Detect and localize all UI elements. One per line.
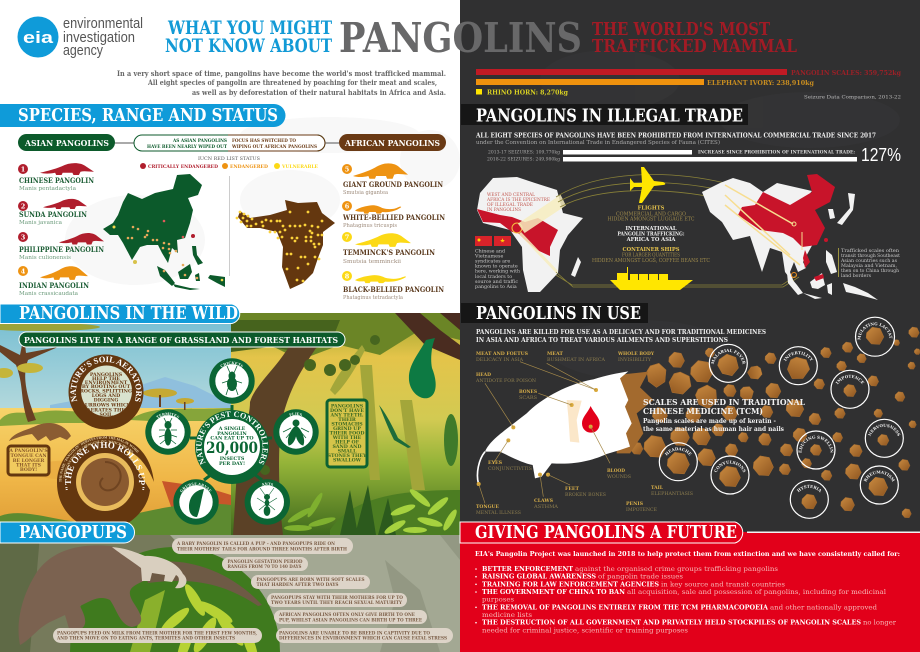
hanging green pangolin bbox=[409, 338, 436, 398]
callout: tongue: BE LONGER bbox=[13, 458, 45, 464]
callout: focus switched: HAVE BEEN NEARLY WIPED OUT bbox=[147, 144, 228, 150]
text: epicentre: IN PANGOLINS bbox=[487, 207, 521, 213]
circle: flies: FLIES bbox=[289, 412, 302, 416]
title: PANGOLINS bbox=[339, 14, 582, 62]
badge: the one who rolls up: THE NAME "PANGOLIN" DERIVES FROM THE MALAY WORD bbox=[59, 436, 138, 482]
species: Philippine pangolin bbox=[18, 232, 104, 261]
species: Chinese pangolin: Manis pentadactyla bbox=[19, 186, 77, 192]
list: calls to action: against the organised crime groups trafficking pangolins bbox=[575, 566, 778, 573]
red background bbox=[460, 532, 920, 652]
bottom foliage bbox=[284, 414, 459, 536]
ailment labels: MALARIAL FEVER bbox=[711, 348, 746, 364]
text: container ships: CONTAINER SHIPS bbox=[623, 247, 680, 253]
badge: nature's pest controllers: NATURE'S PEST CONTROLLERS bbox=[196, 411, 268, 466]
callout: no teeth: SMALL bbox=[338, 448, 357, 454]
chart: seizure data comparison bbox=[476, 69, 902, 100]
fact: maturity bbox=[267, 593, 407, 607]
chart: seizures increase: INCREASE SINCE PROHIBITION OF INTERNATIONAL TRADE: bbox=[698, 150, 855, 156]
subheading: habitats bbox=[19, 332, 345, 347]
species: black-bellied pangolin: Phataginus tetradactyla bbox=[343, 295, 404, 301]
heading: in the wild: PANGOLINS IN THE WILD bbox=[19, 303, 238, 324]
panel: species, range and status bbox=[0, 104, 446, 301]
species: Chinese pangolin: CHINESE PANGOLIN bbox=[19, 176, 94, 185]
circles: ailments treated by scales bbox=[659, 317, 903, 518]
text: ailments statement: PANGOLINS ARE KILLED FOR USE AS A DELICACY AND FOR TRADITIONAL MEDICINES bbox=[476, 328, 766, 336]
text: transit: then on to China through bbox=[841, 268, 899, 274]
text: international pangolin trafficking bbox=[618, 226, 685, 243]
badge: nature's soil aerators: LOGS AND bbox=[92, 393, 120, 399]
species: white-bellied pangolin: Phataginus tricuspis bbox=[343, 223, 397, 229]
icon: plane bbox=[630, 167, 665, 203]
ailment labels: HYSTERIA bbox=[796, 484, 821, 492]
text: syndicates: known to operate bbox=[475, 264, 518, 270]
logo: EIA: investigation bbox=[63, 29, 135, 46]
labels: body parts: PENIS bbox=[626, 501, 643, 507]
callout: no teeth: HELP OF bbox=[335, 440, 360, 446]
fact: pup name bbox=[172, 538, 353, 554]
pangolin pup bbox=[112, 547, 186, 588]
fact: soft scales: PANGOPUPS ARE BORN WITH SOFT SCALES bbox=[256, 577, 365, 583]
callout: no teeth: DON'T HAVE bbox=[330, 408, 364, 414]
callout: no teeth: SAND AND bbox=[332, 444, 362, 450]
ailment labels: IMPOTENCE bbox=[836, 374, 864, 384]
text: container ships: FOR LARGER QUANTITIES bbox=[622, 252, 680, 258]
species: Sunda pangolin: 2 bbox=[21, 202, 25, 210]
legend: IUCN red list status bbox=[140, 156, 318, 170]
labels: body parts: MEAT AND FOETUS bbox=[476, 351, 528, 357]
texture of dark panel bbox=[540, 50, 900, 380]
ailment labels bbox=[664, 322, 900, 492]
ailment labels: RHEUMATISM bbox=[864, 470, 895, 482]
chart: seizure data comparison: PANGOLIN SCALES: 359,752kg bbox=[791, 69, 902, 77]
fact: soft scales: THAT HARDEN AFTER TWO DAYS bbox=[256, 582, 339, 588]
species: giant ground pangolin: 5 bbox=[345, 166, 350, 174]
species: white-bellied pangolin bbox=[342, 201, 445, 229]
text: intro to calls: EIA's Pangolin Project was launched in 2018 to help protect them from extinction and we have consistently called for: bbox=[475, 550, 900, 558]
panel: pangopups bbox=[0, 522, 460, 652]
list: calls to action: TRAINING FOR LAW ENFORCEMENT AGENCIES bbox=[482, 581, 659, 588]
fact: captivity bbox=[276, 628, 453, 643]
chart: seizures increase: 2013-17 SEIZURES: 109,770kg bbox=[488, 150, 560, 156]
list: calls to action bbox=[475, 566, 897, 634]
text: transit: Trafficked scales often bbox=[841, 248, 899, 254]
text: TCM: the same material as human hair and nails bbox=[643, 426, 784, 433]
title: TRAFFICKED MAMMAL bbox=[592, 36, 797, 57]
logo: EIA bbox=[18, 15, 143, 59]
text: container ships: HIDDEN AMONGST LOGS, COFFEE BEANS ETC bbox=[592, 258, 710, 264]
badge: nature's pest controllers: A SINGLE bbox=[218, 426, 246, 432]
callout: tongue: TONGUE CAN bbox=[10, 453, 47, 459]
species: white-bellied pangolin: WHITE-BELLIED PANGOLIN bbox=[342, 213, 445, 222]
callout: no teeth: ANY TEETH. bbox=[329, 412, 364, 418]
text: transit: land borders bbox=[841, 273, 872, 279]
badge: nature's pest controllers: PER DAY! bbox=[219, 461, 245, 467]
fact: maturity: TWO YEARS UNTIL THEY REACH SEXUAL MATURITY bbox=[271, 600, 403, 606]
text: international pangolin trafficking: INTERNATIONAL bbox=[626, 226, 677, 232]
labels: body parts: TONGUE bbox=[476, 504, 499, 510]
fact: captivity: DIFFERENCES IN ENVIRONMENT WHICH CAN CAUSE FATAL STRESS bbox=[279, 636, 448, 642]
scales cloud bbox=[630, 327, 920, 518]
labels: body parts: FEET bbox=[565, 486, 579, 492]
species: Philippine pangolin: 3 bbox=[21, 234, 26, 242]
species: Indian pangolin: INDIAN PANGOLIN bbox=[19, 281, 89, 290]
text: TCM bbox=[643, 397, 805, 433]
species: Indian pangolin bbox=[18, 266, 89, 297]
callout: no teeth: PANGOLINS bbox=[331, 404, 364, 410]
chart: seizures increase bbox=[487, 145, 901, 165]
circle: crickets: CRICKETS bbox=[220, 362, 244, 368]
labels: body parts: ELEPHANTIASIS bbox=[651, 491, 694, 497]
ailment labels: REDUCING SWELLING bbox=[798, 436, 834, 453]
heading: future: GIVING PANGOLINS A FUTURE bbox=[475, 522, 737, 543]
callout: tongue: THAT ITS bbox=[16, 462, 42, 468]
badge: nature's pest controllers: 20,000 bbox=[206, 438, 258, 457]
text: flights bbox=[608, 206, 695, 222]
callout: tongue: A PANGOLIN'S bbox=[8, 448, 48, 454]
ailment labels: NERVOUSNESS bbox=[868, 424, 900, 436]
background: white left half bbox=[0, 0, 460, 652]
intro text: as well as by deforestation of their natural habitats in Africa and Asia. bbox=[192, 88, 446, 97]
text: prohibition statement: ALL EIGHT SPECIES OF PANGOLINS HAVE BEEN PROHIBITED FROM INTERNATIONAL COMMERCIAL TRADE SINCE 2017 bbox=[475, 132, 876, 140]
text: flights: COMMERCIAL AND CARGO bbox=[616, 212, 686, 218]
callout: no teeth: WITH THE bbox=[332, 435, 362, 441]
badge: nature's soil aerators: AERATES THE bbox=[86, 408, 125, 414]
callout: no teeth: STOMACHS bbox=[331, 422, 363, 428]
fact: pup name: A BABY PANGOLIN IS CALLED A PUP – AND PANGOPUPS RIDE ON bbox=[176, 541, 336, 547]
pill: asian pangolins: ASIAN PANGOLINS bbox=[24, 139, 109, 149]
species: Philippine pangolin: PHILIPPINE PANGOLIN bbox=[19, 245, 104, 254]
list: calls to action: THE GOVERNMENT OF CHINA TO BAN bbox=[482, 589, 625, 596]
list: calls to action: no longer bbox=[863, 620, 897, 627]
text: flights: HIDDEN AMONGST LUGGAGE ETC bbox=[608, 216, 695, 222]
callout: focus switched: FOCUS HAS SWITCHED TO bbox=[232, 138, 296, 144]
ailment labels: STIMULATING LACTATION bbox=[858, 322, 892, 340]
connectors between pest circles bbox=[190, 405, 272, 480]
species: white-bellied pangolin: 6 bbox=[345, 202, 350, 210]
ailment labels: CONVULSIONS bbox=[714, 460, 746, 472]
text: TCM: Pangolin scales are made up of keratin - bbox=[643, 418, 776, 425]
labels: body parts: IMPOTENCE bbox=[626, 507, 657, 513]
list: calls to action: RAISING GLOBAL AWARENESS bbox=[482, 574, 596, 580]
callout: focus switched: AS ASIAN PANGOLINS bbox=[172, 138, 227, 144]
callout: focus switched: WIPING OUT AFRICAN PANGOLINS bbox=[231, 144, 317, 150]
text: syndicates: Chinese and bbox=[475, 248, 505, 254]
badge: nature's pest controllers: INSECTS bbox=[220, 456, 245, 462]
species: Philippine pangolin: Manis culionensis bbox=[19, 255, 71, 261]
text: transit: Asian countries such as bbox=[840, 258, 898, 264]
badge: nature's soil aerators: ENVIRONMENT bbox=[85, 380, 128, 386]
chart: seizure data comparison: RHINO HORN: 8,270kg bbox=[487, 88, 569, 96]
logo: EIA: environmental bbox=[63, 15, 143, 32]
text: epicentre: OF ILLEGAL TRADE bbox=[487, 202, 534, 208]
labels: body parts: BUSHMEAT IN AFRICA bbox=[547, 357, 605, 363]
species: black-bellied pangolin: BLACK-BELLIED PANGOLIN bbox=[343, 285, 444, 294]
text: epicentre: WEST AND CENTRAL bbox=[487, 192, 535, 198]
chart: seizure data comparison: ELEPHANT IVORY: 238,910kg bbox=[707, 79, 815, 87]
labels: body parts: CONJUNCTIVITIS bbox=[488, 466, 533, 472]
species: giant ground pangolin: Smutsia gigantea bbox=[343, 190, 389, 196]
species: Sunda pangolin: SUNDA PANGOLIN bbox=[19, 210, 87, 219]
intro text: All eight species of pangolin are threatened by poaching for their meat and scales, bbox=[147, 78, 437, 87]
pill: asian pangolins bbox=[18, 134, 115, 151]
icon: container ship bbox=[610, 267, 693, 290]
map: Asia destination bbox=[702, 174, 878, 300]
text: epicentre: AFRICA IS THE EPICENTRE bbox=[486, 197, 551, 203]
text: syndicates: local traders to bbox=[475, 274, 512, 280]
map: Africa source bbox=[477, 177, 583, 292]
labels: body parts: TAIL bbox=[651, 485, 663, 491]
labels: body parts bbox=[475, 351, 694, 516]
list: calls to action: THE DESTRUCTION OF ALL GOVERNMENT AND PRIVATELY HELD STOCKPILES OF PANGOLIN SCALES bbox=[482, 620, 861, 627]
fact: pup name: THEIR MOTHERS' TAILS FOR AROUND THREE MONTHS AFTER BIRTH bbox=[177, 546, 348, 552]
jungle background bbox=[231, 313, 460, 535]
labels: body parts: BONES bbox=[519, 389, 537, 395]
chart: seizures increase: 2018-22 SEIZURES: 249,980kg bbox=[487, 158, 560, 162]
panel: pangolins in use bbox=[461, 303, 920, 519]
legend: IUCN red list status: VULNERABLE bbox=[281, 164, 318, 170]
ailment labels: INFERTILITY bbox=[784, 351, 814, 362]
tail and branch bbox=[142, 561, 262, 606]
map: Africa range bbox=[236, 200, 335, 289]
species: Sunda pangolin bbox=[18, 199, 87, 226]
circle: ants bbox=[244, 479, 290, 525]
acacia trees bbox=[0, 323, 194, 422]
species: Chinese pangolin bbox=[18, 163, 94, 192]
labels: body parts: DELICACY IN ASIA bbox=[476, 357, 523, 363]
list: calls to action: of pangolin trade issues bbox=[598, 574, 683, 580]
text: transit: transit through Southeast bbox=[841, 253, 900, 259]
species: Indian pangolin: Manis crassicaudata bbox=[19, 291, 79, 297]
list: calls to action: THE REMOVAL OF PANGOLINS ENTIRELY FROM THE TCM PHARMACOPOEIA bbox=[482, 604, 768, 611]
badge: nature's soil aerators: HELP THE bbox=[92, 376, 120, 382]
list: calls to action: needed for criminal justice, scientific or training purposes bbox=[482, 627, 688, 634]
heading: pangopups: PANGOPUPS bbox=[19, 522, 127, 543]
chameleon bbox=[379, 405, 411, 448]
text: international pangolin trafficking: AFRICA TO ASIA bbox=[626, 237, 676, 243]
pangolin body outline with organs bbox=[477, 362, 653, 503]
badge: the one who rolls up: "PENGGULING" OR "PENGGULIN", WHICH MEANS bbox=[63, 440, 134, 478]
species: Sunda pangolin: Manis javanica bbox=[19, 220, 63, 226]
species: Indian pangolin: 4 bbox=[21, 268, 26, 276]
green leaf circle bbox=[70, 547, 280, 652]
text: syndicates: source and traffic bbox=[475, 279, 518, 285]
savannah background bbox=[0, 313, 231, 535]
chart: seizure data comparison: Seizure Data Comparison, 2013-22 bbox=[804, 94, 901, 100]
labels: body parts: ASTHMA bbox=[533, 504, 558, 510]
pill: african pangolins: AFRICAN PANGOLINS bbox=[344, 139, 440, 149]
callout: no teeth bbox=[327, 400, 367, 467]
species: giant ground pangolin bbox=[342, 163, 443, 196]
fact: birth: AFRICAN PANGOLINS OFTEN ONLY GIVE BIRTH TO ONE bbox=[278, 612, 415, 618]
list: calls to action: purposes bbox=[482, 597, 514, 604]
list: calls to action: in key source and transit countries bbox=[661, 581, 785, 588]
species: giant ground pangolin: GIANT GROUND PANGOLIN bbox=[343, 180, 443, 189]
text: ailments statement: IN ASIA AND AFRICA TO TREAT VARIOUS AILMENTS AND SUPERSTITIONS bbox=[476, 336, 728, 344]
text: ailments statement bbox=[476, 328, 766, 344]
text: flights: FLIGHTS bbox=[638, 206, 665, 212]
circle: termites bbox=[145, 409, 191, 455]
panel: pangolins in illegal trade bbox=[461, 104, 901, 300]
circle: ants: ANTS bbox=[262, 482, 274, 486]
hanging tree top right bbox=[395, 313, 460, 360]
pill: african pangolins bbox=[339, 134, 446, 151]
badge: nature's pest controllers: PANGOLIN bbox=[217, 431, 247, 437]
text: syndicates: here, working with bbox=[475, 268, 520, 274]
icon: flags of China and Vietnam bbox=[475, 236, 511, 246]
badge: nature's soil aerators: NATURE'S SOIL AERATORS bbox=[70, 356, 142, 402]
heading: species: SPECIES, RANGE AND STATUS bbox=[18, 105, 278, 126]
text: TCM: SCALES ARE USED IN TRADITIONAL bbox=[643, 397, 805, 407]
species: black-bellied pangolin: 8 bbox=[345, 272, 350, 280]
heading: illegal trade: PANGOLINS IN ILLEGAL TRADE bbox=[476, 106, 743, 126]
leaves over trunk bbox=[260, 335, 380, 475]
list: calls to action: BETTER ENFORCEMENT bbox=[482, 566, 573, 573]
badge: nature's soil aerators: BURROWS WHICH bbox=[81, 402, 132, 408]
tree trunk and branches bbox=[233, 345, 318, 535]
callout: no teeth: SWALLOW bbox=[333, 458, 362, 464]
fact: gestation: RANGES FROM 70 TO 140 DAYS bbox=[228, 564, 302, 570]
badge: the one who rolls up: "THE ONE WHO ROLLS UP" bbox=[65, 442, 145, 490]
intro text bbox=[117, 69, 446, 97]
list: calls to action: all acquisition, sale and possession of pangolins, including for medicinal bbox=[627, 589, 886, 596]
callout: focus switched bbox=[115, 135, 339, 151]
labels: body parts: CLAWS bbox=[534, 498, 553, 504]
badge: nature's soil aerators: PANGOLINS bbox=[90, 372, 123, 378]
badge: nature's soil aerators: ROCKS, SPLITTING bbox=[80, 388, 132, 394]
text: container ships bbox=[592, 247, 710, 264]
list: calls to action: medicine lists bbox=[482, 612, 532, 619]
map: Asia range bbox=[103, 174, 225, 290]
callout: no teeth: GRIND UP bbox=[333, 426, 361, 432]
fact: maturity: PANGOPUPS STAY WITH THEIR MOTHERS FOR UP TO bbox=[271, 595, 403, 601]
labels: body parts: EYES bbox=[488, 460, 502, 466]
circle: grubs and larvae bbox=[173, 479, 219, 525]
callout: no teeth: STONES THEY bbox=[328, 453, 367, 459]
species: Temminck's pangolin: TEMMINCK'S PANGOLIN bbox=[343, 248, 435, 257]
labels: body parts: BROKEN BONES bbox=[565, 492, 607, 498]
circle: grubs and larvae: GRUBS/LARVAE bbox=[180, 482, 212, 492]
species: Temminck's pangolin bbox=[342, 232, 435, 265]
text: epicentre bbox=[486, 192, 551, 213]
labels: body parts: ANTIDOTE FOR POISON bbox=[475, 378, 537, 384]
text: syndicates: syndicates are bbox=[475, 258, 510, 264]
labels: body parts: BLOOD bbox=[607, 468, 626, 474]
text: syndicates: pangolins to Asia bbox=[475, 284, 517, 290]
labels: body parts: WHOLE BODY bbox=[617, 351, 654, 357]
text: syndicates: Vietnamese bbox=[474, 254, 503, 260]
labels: body parts: HEAD bbox=[476, 372, 492, 378]
text: prohibition statement bbox=[475, 132, 876, 146]
species: Temminck's pangolin: 7 bbox=[345, 234, 349, 242]
text: syndicates bbox=[474, 248, 520, 290]
background: dark right half bbox=[460, 0, 920, 652]
labels: body parts: WOUNDS bbox=[607, 474, 632, 480]
routes: flight arcs bbox=[556, 175, 735, 207]
subheading: habitats: PANGOLINS LIVE IN A RANGE OF GRASSLAND AND FOREST HABITATS bbox=[24, 335, 338, 345]
fact: soft scales bbox=[251, 575, 370, 589]
labels: body parts: MENTAL ILLNESS bbox=[476, 510, 522, 516]
callout: tongue: BODY! bbox=[20, 467, 37, 473]
text: TCM: CHINESE MEDICINE (TCM) bbox=[643, 406, 763, 416]
text: transit: Malaysia and Vietnam, bbox=[841, 263, 898, 269]
list: calls to action: and other nationally approved bbox=[770, 604, 877, 611]
callout: no teeth: THEIR FOOD bbox=[330, 430, 364, 436]
callout: no teeth: THEIR bbox=[338, 417, 356, 423]
badge: nature's pest controllers: CAN EAT UP TO bbox=[210, 436, 254, 442]
badge: nature's soil aerators: DIGGING bbox=[94, 398, 118, 404]
title: NOT KNOW ABOUT bbox=[165, 36, 332, 57]
chart: seizures increase: 127% bbox=[861, 145, 901, 165]
title: WHAT YOU MIGHT bbox=[167, 18, 332, 39]
species: Temminck's pangolin: Smutsia temminckii bbox=[343, 259, 401, 265]
title bbox=[165, 14, 797, 62]
fact: feeding: PANGOPUPS FEED ON MILK FROM THEIR MOTHER FOR THE FIRST FEW MONTHS, bbox=[57, 630, 257, 636]
panel: pangolins in the wild scene bbox=[0, 303, 460, 535]
fact: captivity: PANGOLINS ARE UNABLE TO BE BREED IN CAPTIVITY DUE TO bbox=[279, 630, 430, 636]
text: international pangolin trafficking: PANGOLIN TRAFFICKING: bbox=[618, 232, 685, 238]
circle: flies bbox=[273, 409, 319, 455]
legend: IUCN red list status: ENDANGERED bbox=[230, 164, 268, 170]
badge: nature's soil aerators: SOIL bbox=[100, 412, 113, 418]
logo: EIA: agency bbox=[63, 42, 103, 59]
fact: gestation: PANGOLIN GESTATION PERIOD bbox=[228, 559, 303, 565]
badge: nature's soil aerators bbox=[68, 354, 144, 430]
adult pangolin bbox=[19, 545, 146, 645]
labels: body parts: MEAT bbox=[547, 351, 563, 357]
labels: body parts: SCARS bbox=[519, 395, 538, 401]
legend: IUCN red list status: CRITICALLY ENDANGERED bbox=[148, 164, 218, 170]
text: prohibition statement: under the Convention on International Trade in Endangered Species of Fauna (CITES) bbox=[476, 139, 720, 146]
circle: termites: TERMITES bbox=[156, 412, 180, 418]
fact: birth: PUP, WHILST ASIAN PANGOLINS CAN BIRTH UP TO THREE bbox=[279, 618, 422, 624]
title: THE WORLD'S MOST bbox=[592, 19, 770, 40]
fact: feeding: AND THEN MOVE ON TO EATING ANTS, TERMITES AND OTHER INSECTS bbox=[56, 636, 236, 642]
forest background bbox=[0, 535, 460, 652]
intro text: In a very short space of time, pangolins have become the world's most trafficked mammal. bbox=[117, 69, 446, 78]
species: black-bellied pangolin bbox=[342, 271, 444, 301]
ailment labels: HEADACHE bbox=[664, 447, 692, 456]
fact: gestation bbox=[222, 557, 308, 571]
legend: IUCN red list status: IUCN RED LIST STATUS bbox=[198, 156, 260, 162]
labels: body parts: INVISIBILITY bbox=[618, 357, 652, 363]
panel: giving pangolins a future bbox=[460, 522, 920, 652]
badge: nature's soil aerators: BY ROOTING OUT bbox=[82, 384, 131, 390]
logo: EIA: eia bbox=[23, 28, 54, 47]
fact: birth bbox=[274, 610, 427, 624]
heading: in use: PANGOLINS IN USE bbox=[476, 303, 641, 324]
route: shipping line bbox=[556, 272, 799, 287]
species: Chinese pangolin: 1 bbox=[21, 166, 25, 174]
circle: crickets bbox=[209, 358, 255, 404]
pangolin silhouette bbox=[9, 423, 71, 441]
badge: the one who rolls up bbox=[57, 436, 154, 522]
text: transit bbox=[838, 248, 900, 279]
divider between maps bbox=[229, 176, 230, 276]
faint world map backdrop bbox=[65, 117, 460, 285]
callout: tongue bbox=[8, 446, 49, 475]
fact: feeding bbox=[53, 628, 262, 643]
